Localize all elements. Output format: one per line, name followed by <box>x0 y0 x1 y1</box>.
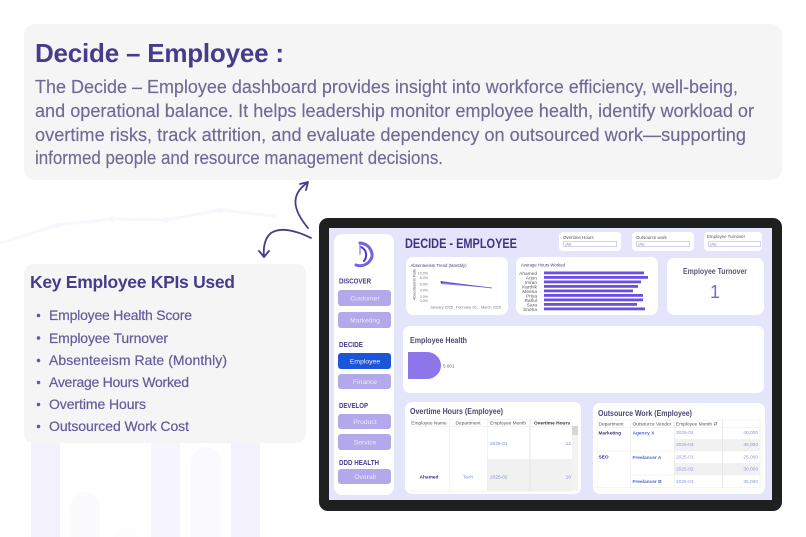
card: average hours worked: Karthik <box>522 284 538 290</box>
filter: overtime hours: Overtime Hours <box>563 235 595 240</box>
nav group: discover: Customer <box>350 296 380 302</box>
table: outsource work: Employee Month ⇵ <box>676 422 717 428</box>
list: KPIs: Absenteeism Rate (Monthly) <box>49 352 227 368</box>
table: outsource work: Agency X <box>632 430 655 436</box>
text block: description: and operational balance. It helps leadership monitor employee health, identify workload or <box>35 101 754 121</box>
nav group: decide: Employee <box>350 358 380 366</box>
table: overtime hours: 2025-01 <box>490 441 508 447</box>
card: employee health: 5.601 <box>443 364 455 368</box>
filter: employee turnover: (All) <box>710 242 716 246</box>
table: outsource work: Outsource Vendor <box>632 422 672 428</box>
card: absenteeism trend <box>406 257 508 315</box>
list: KPIs: Average Hours Worked <box>49 374 189 390</box>
table: outsource work: Department <box>598 422 624 428</box>
card: absenteeism trend: 4.0% <box>420 288 429 292</box>
heading: Decide – Employee: Decide – Employee : <box>35 38 284 68</box>
table: outsource work <box>593 403 765 494</box>
list: KPIs: Employee Health Score <box>49 307 192 323</box>
table: overtime hours: Overtime Hours (Employee) <box>410 407 503 416</box>
card: absenteeism trend: Absenteeism Trend (Monthly) <box>410 263 467 269</box>
table: overtime hours: Employee Name <box>411 420 447 426</box>
heading: dashboard title: DECIDE - EMPLOYEE <box>405 236 517 251</box>
filter: employee turnover: Employee Turnover <box>707 234 746 239</box>
table: overtime hours: Employee Month <box>490 420 526 426</box>
text block: description <box>35 77 754 168</box>
table: outsource work: 30,000 <box>743 466 758 472</box>
list: KPIs: Outsourced Work Cost <box>49 418 189 434</box>
nav group: develop: Product <box>353 419 377 426</box>
table: outsource work: Marketing <box>598 430 621 436</box>
nav group: discover: DISCOVER <box>339 276 371 286</box>
card: average hours worked: Sara <box>527 302 537 308</box>
table: overtime hours: Overtime Hours <box>534 420 570 426</box>
nav group: discover <box>338 276 391 328</box>
icon: logo <box>356 243 372 266</box>
card: absenteeism trend: 2.0% <box>420 295 429 299</box>
table: overtime hours: 12 <box>566 441 571 447</box>
nav group: decide: Finance <box>353 379 377 386</box>
card: average hours worked: Average Hours Worked <box>521 262 565 268</box>
card: employee turnover <box>667 258 764 315</box>
background: faint bar chart <box>31 440 260 537</box>
text block: description: The Decide – Employee dashboard provides insight into workforce efficiency, well-being, <box>35 77 738 97</box>
nav group: decide: DECIDE <box>339 340 363 349</box>
table: outsource work: 25,000 <box>743 454 758 460</box>
card: absenteeism trend: March 2025 <box>481 306 501 310</box>
card: employee turnover: Employee Turnover <box>683 267 747 276</box>
text block: description: informed people and resource management decisions. <box>35 148 443 168</box>
list: KPIs: Employee Turnover <box>49 330 168 346</box>
table: outsource work: 35,000 <box>743 479 758 485</box>
list: KPIs <box>37 307 227 434</box>
heading: Key Employee KPIs Used: Key Employee KPIs Used <box>30 272 235 292</box>
filter: employee turnover <box>704 232 762 251</box>
arrow: down to KPI panel <box>259 230 311 257</box>
card: absenteeism trend: Absenteeism Rate <box>412 269 416 300</box>
table: outsource work: 45,000 <box>743 442 758 448</box>
card: employee turnover: 1 <box>710 282 720 302</box>
card: employee health: Employee Health <box>410 336 467 345</box>
card: employee health <box>403 326 764 393</box>
table: outsource work: 2025-03 <box>676 442 694 448</box>
table: outsource work: SEO <box>598 454 609 460</box>
filter: outsource work: Outsource work <box>636 235 668 240</box>
table: overtime hours: Department <box>455 420 481 426</box>
table: outsource work: 40,000 <box>743 430 758 436</box>
card: absenteeism trend: 10.0% <box>418 272 429 276</box>
table: overtime hours: 10 <box>566 474 571 480</box>
monitor: dashboard screenshot <box>319 218 782 511</box>
arrow: up to intro panel <box>295 182 308 228</box>
table: outsource work: Freelancer B <box>632 479 662 485</box>
card: absenteeism trend: January 2025 <box>430 306 453 310</box>
table: overtime hours <box>405 402 581 494</box>
nav group: decide <box>338 340 391 389</box>
text block: description: overtime risks, track attrition, and evaluate dependency on outsourced work—supporting <box>35 125 746 145</box>
table: overtime hours: Ahamed <box>420 474 439 480</box>
panel: intro <box>24 24 782 180</box>
nav group: ddd health <box>338 458 391 484</box>
table: outsource work: Freelancer A <box>632 455 662 461</box>
table: overtime hours: Tech <box>463 474 473 480</box>
table: outsource work: Outsource Work (Employee) <box>598 408 692 418</box>
card: absenteeism trend: 8.0% <box>420 276 429 280</box>
filter: overtime hours <box>559 232 621 251</box>
filter: overtime hours: (All) <box>565 242 571 246</box>
list: KPIs: Overtime Hours <box>49 396 146 412</box>
panel: sidebar <box>334 234 394 495</box>
card: average hours worked: Rahul <box>524 298 537 304</box>
table: outsource work: 2025-02 <box>676 466 694 472</box>
card: average hours worked: Priya <box>526 294 537 300</box>
panel: key employee KPIs <box>24 264 306 443</box>
card: average hours worked: Ahamed <box>519 271 537 277</box>
nav group: develop <box>338 401 391 450</box>
table: outsource work: 2025-02 <box>676 430 694 436</box>
table: outsource work: 2025-03 <box>676 479 694 485</box>
table: overtime hours: 2025-02 <box>490 474 508 480</box>
card: average hours worked: Imran <box>525 280 537 286</box>
card: average hours worked <box>516 257 658 315</box>
table: outsource work: 2025-01 <box>676 454 694 460</box>
nav group: discover: Marketing <box>350 318 380 324</box>
card: absenteeism trend: February 20... <box>456 306 480 310</box>
card: average hours worked: Meena <box>522 289 537 295</box>
background: faint line chart <box>0 207 277 243</box>
card: average hours worked: Arjun <box>526 276 537 282</box>
filter: outsource work: (All) <box>638 242 644 246</box>
filter: outsource work <box>632 232 694 251</box>
card: absenteeism trend: 6.0% <box>420 282 429 286</box>
nav group: develop: Service <box>354 440 377 446</box>
card: absenteeism trend: 0.0% <box>420 299 429 303</box>
card: average hours worked: Sneha <box>523 307 537 313</box>
nav group: develop: DEVELOP <box>339 401 368 410</box>
nav group: ddd health: Overall <box>354 474 376 481</box>
nav group: ddd health: DDD HEALTH <box>339 458 379 467</box>
